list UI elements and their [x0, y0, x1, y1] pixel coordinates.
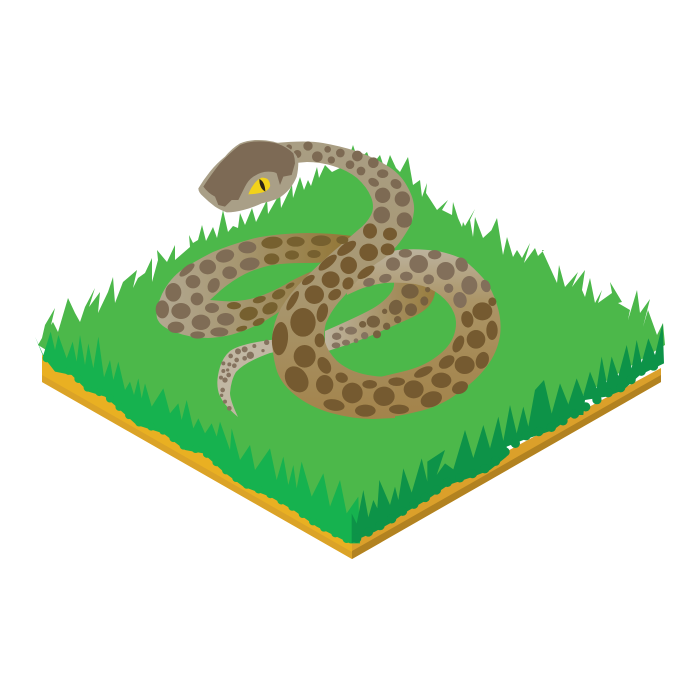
- snake: [156, 140, 501, 419]
- snake neck spots: [286, 141, 412, 228]
- soil base: [42, 355, 661, 559]
- grass top surface with back spikes: [38, 145, 665, 537]
- snake head: [198, 140, 298, 212]
- left front grass: [35, 332, 360, 543]
- spots: inner strand: [359, 284, 430, 338]
- snake inner strand: [325, 270, 436, 352]
- snake tail: [217, 339, 285, 417]
- head base: [198, 140, 298, 212]
- snake left loop: [157, 233, 353, 338]
- spots: left loop: [156, 235, 348, 339]
- eye: [248, 178, 270, 194]
- head cap marking: [203, 141, 295, 207]
- right front grass: [352, 323, 664, 543]
- spots: main body: [271, 216, 498, 417]
- snake spots on body: [156, 216, 498, 417]
- spots: light right loop: [362, 249, 492, 309]
- spots: tail: [219, 327, 368, 411]
- snake main body and neck: [272, 142, 414, 419]
- snake right loop: [330, 249, 501, 418]
